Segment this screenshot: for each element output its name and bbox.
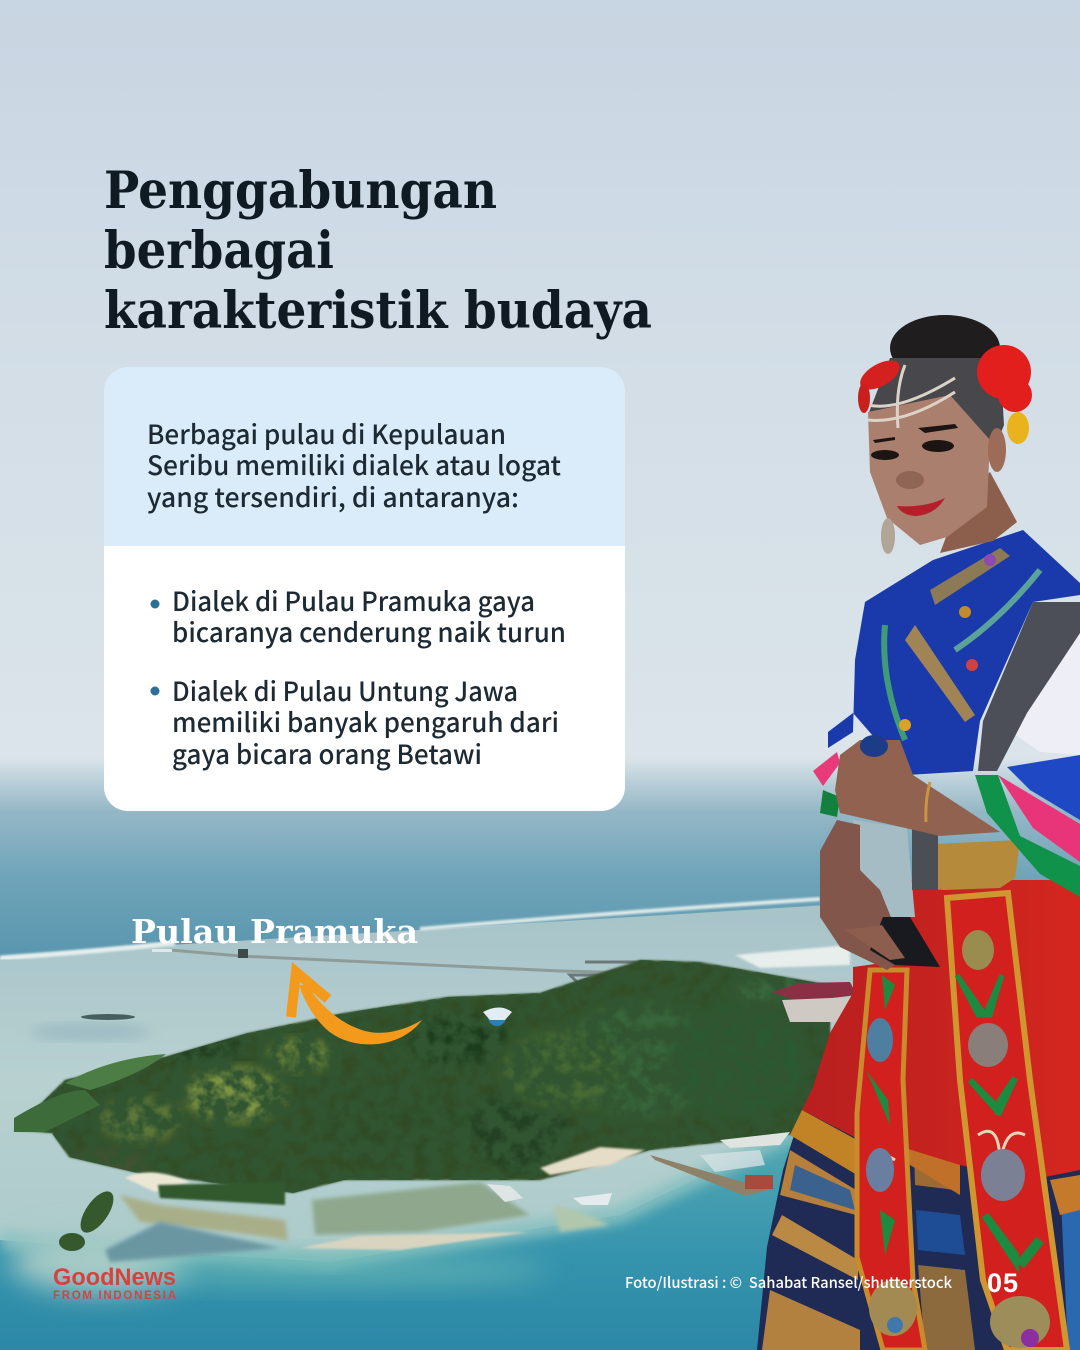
bullet: Pulau Untung Jawa: Dialek di Pulau Untung Jawa: [172, 670, 518, 709]
card header: Berbagai pulau di Kepulauan: [147, 413, 506, 452]
arrow: pointing to Pulau Pramuka: [291, 972, 422, 1044]
card body: [104, 546, 625, 811]
bullet: Pulau Untung Jawa: memiliki banyak pengaruh dari: [172, 701, 559, 740]
right sleeve ruffles: [975, 755, 1080, 897]
logo: GoodNews from Indonesia: GoodNews: [53, 1264, 176, 1291]
hand over phone: [845, 925, 905, 960]
background: sky: [0, 0, 1080, 760]
ear: [988, 428, 1006, 472]
phone: [870, 917, 940, 967]
bullet: Pulau Untung Jawa: gaya bicara orang Betawi: [172, 733, 482, 772]
neck: [940, 472, 1017, 553]
bullet: Pulau Pramuka: [150, 580, 566, 650]
map label: Pulau Pramuka: Pulau Pramuka: [131, 912, 418, 951]
hand holding bottle: [835, 740, 1000, 836]
boats and dock: [487, 1132, 790, 1205]
left embroidered sash: [857, 970, 925, 1350]
logo: GoodNews from Indonesia: FROM INDONESIA: [53, 1290, 176, 1302]
hotel building: [772, 982, 857, 1022]
eyes and brows: [871, 424, 958, 460]
earring: [881, 518, 895, 554]
lips: [897, 498, 945, 516]
lower arm and hand: [820, 820, 907, 970]
left sleeve ruffles: [813, 752, 840, 817]
hair bun: [890, 315, 1000, 381]
water bottle: [853, 820, 915, 917]
side hair: [868, 358, 1004, 460]
title: [104, 161, 652, 341]
white sleeve: [1007, 633, 1080, 755]
bullet: Pulau Pramuka: Dialek di Pulau Pramuka gaya: [172, 580, 535, 619]
background: sea and lagoon: [0, 758, 1080, 1350]
beaded tassels: [912, 825, 938, 890]
title: karakteristik budaya: [104, 281, 652, 341]
card header: [104, 367, 625, 546]
card header: Seribu memiliki dialek atau logat: [147, 444, 561, 483]
patterned lower skirt: [757, 1110, 1080, 1350]
bullet: Pulau Pramuka: bicaranya cenderung naik turun: [172, 611, 566, 650]
right embroidered sash: [947, 893, 1067, 1350]
pier to Pulau Pramuka: [152, 949, 650, 985]
island: forest: [0, 950, 840, 1200]
bracelet: [926, 782, 930, 822]
nose shadow: [896, 471, 924, 489]
title: Penggabungan: [104, 161, 497, 221]
title: berbagai: [104, 221, 334, 281]
hair flower: right: [977, 345, 1032, 444]
page number: 05: [987, 1268, 1018, 1298]
panel: dialect card: [104, 367, 625, 811]
island: beach and lagoon flats: [59, 1147, 645, 1262]
sleeve fringe: [978, 602, 1080, 771]
card header: yang tersendiri, di antaranya:: [147, 476, 519, 515]
bullet: Pulau Untung Jawa: [150, 670, 559, 772]
face: [868, 395, 990, 545]
bottle cap: [860, 735, 888, 757]
red satin skirt: [802, 880, 1080, 1180]
hair flower: left: [855, 354, 905, 413]
woman in traditional costume: [757, 315, 1080, 1350]
headpiece: [868, 365, 955, 428]
waist belt: [912, 840, 1020, 890]
photo credit: Foto/Ilustrasi : © Sahabat Ransel/shutterstock: [625, 1272, 952, 1293]
blue beaded blouse: [828, 530, 1080, 775]
